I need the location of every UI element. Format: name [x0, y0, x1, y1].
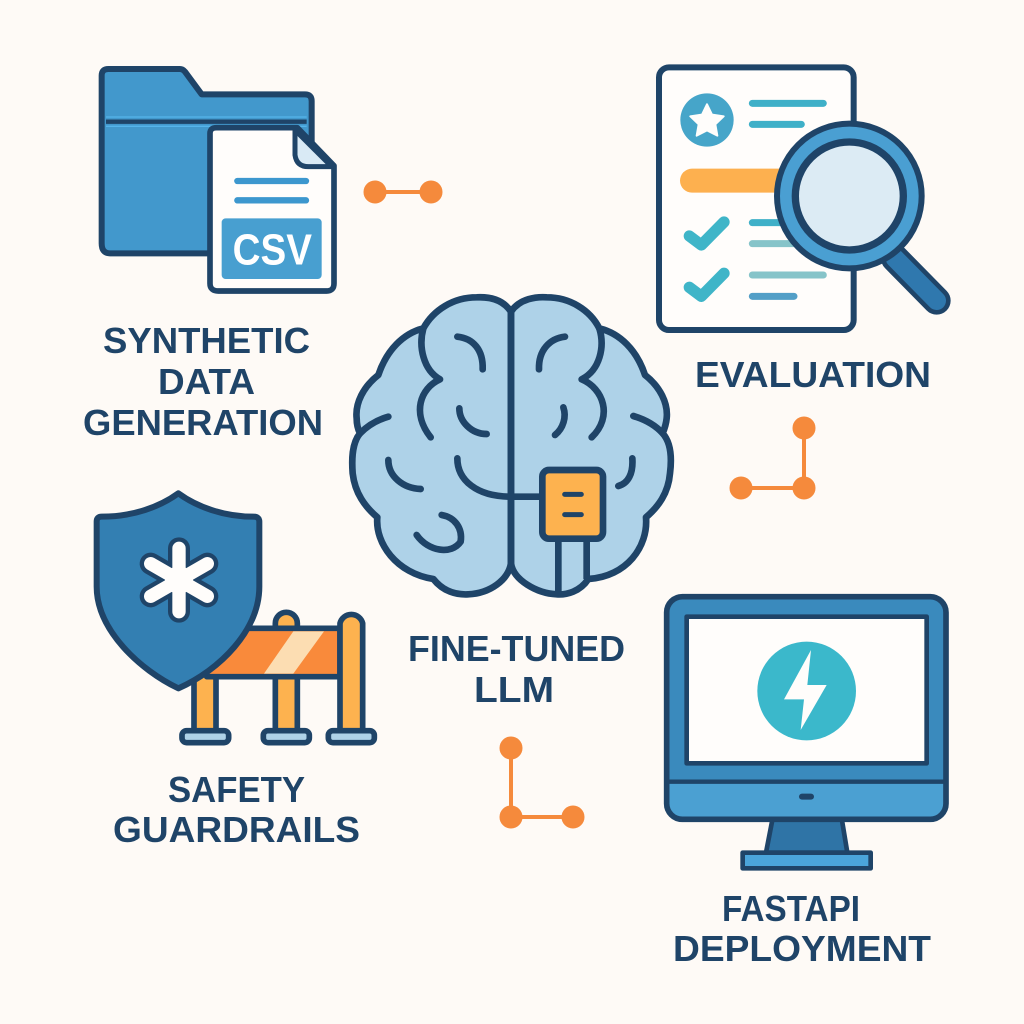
right hemisphere [457, 297, 671, 594]
heading: synthetic data generation [83, 320, 323, 443]
heading: fastapi deployment [673, 888, 931, 969]
barrier [182, 612, 374, 743]
heading: synthetic data generation: SYNTHETIC [103, 320, 310, 361]
heading: safety guardrails [113, 769, 360, 850]
icon: folder with CSV file [102, 69, 334, 291]
icon: shield and barrier [97, 493, 374, 743]
screen [687, 617, 927, 763]
monitor body [667, 597, 946, 819]
report document [659, 67, 854, 330]
magnifier [777, 124, 937, 301]
heading: evaluation: EVALUATION [695, 354, 931, 395]
heading: fine-tuned LLM: LLM [474, 669, 554, 710]
heading: synthetic data generation: DATA [158, 361, 255, 402]
connector: top left [364, 181, 442, 203]
icon: monitor with FastAPI bolt [667, 597, 946, 868]
chip [542, 470, 603, 539]
heading: safety guardrails: GUARDRAILS [113, 809, 360, 850]
shield [97, 493, 259, 688]
stand [743, 818, 871, 868]
connector: bottom [500, 737, 584, 828]
CSV file: CSV [233, 225, 313, 274]
heading: safety guardrails: SAFETY [168, 769, 305, 810]
heading: fastapi deployment: FASTAPI [722, 888, 860, 929]
folder [102, 69, 312, 253]
icon: brain with chip [352, 297, 671, 594]
left hemisphere [352, 297, 511, 594]
icon: evaluation report with magnifier [659, 67, 937, 330]
heading: synthetic data generation: GENERATION [83, 402, 323, 443]
heading: fine-tuned LLM: FINE-TUNED [408, 628, 625, 669]
heading: fastapi deployment: DEPLOYMENT [673, 928, 931, 969]
CSV file [210, 128, 334, 291]
connector: right [730, 417, 815, 499]
heading: fine-tuned LLM [408, 628, 625, 710]
